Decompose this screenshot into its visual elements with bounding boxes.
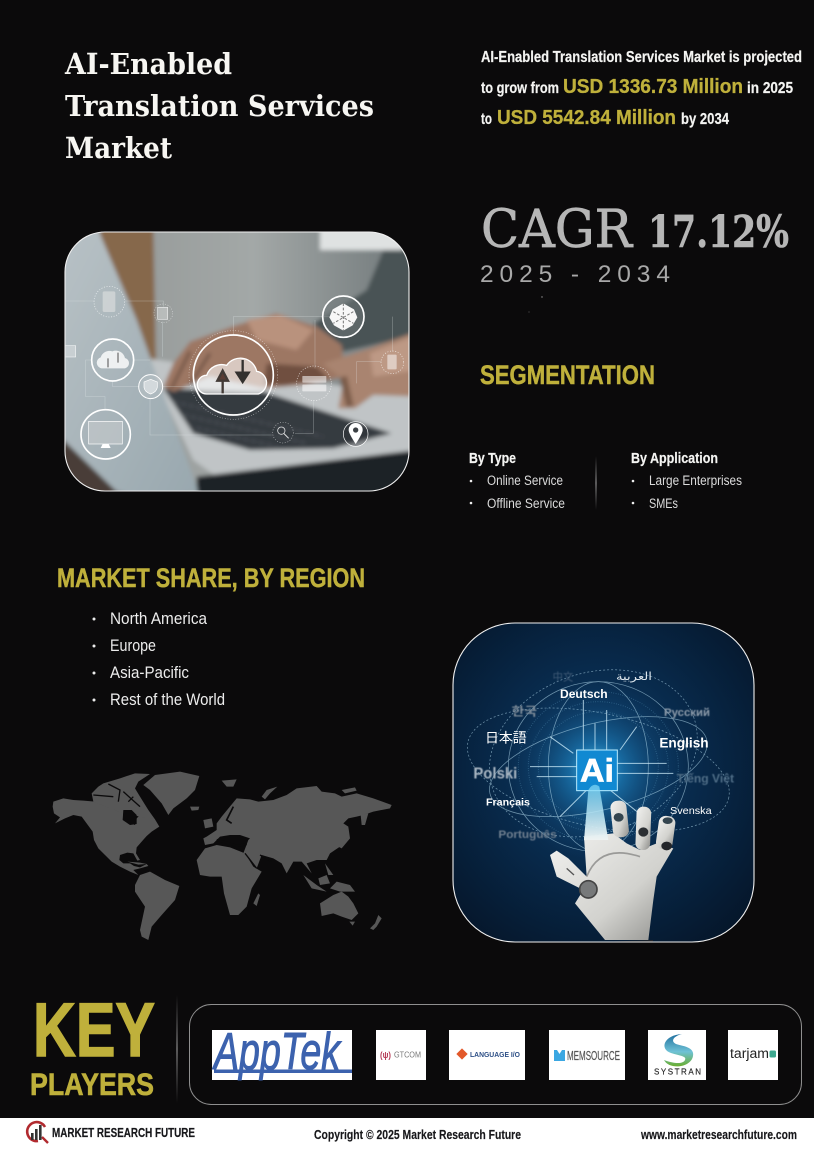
monitor icon [81, 410, 130, 459]
key players panel [190, 1004, 802, 1104]
heading: segmentation: SEGMENTATION [480, 360, 655, 390]
market projection text: to [481, 111, 492, 128]
logo: Language I/O [449, 1030, 525, 1080]
segment list: by type: Online Service [487, 473, 563, 488]
language labels: Français [486, 797, 530, 808]
segment list: by application: By Application [631, 450, 718, 467]
market projection text: by 2034 [681, 111, 729, 128]
CAGR: CAGR [481, 200, 634, 260]
language labels: 中文 [553, 671, 574, 684]
robot hand [550, 785, 676, 955]
logo: Systran [648, 1030, 706, 1080]
central cloud icon [189, 331, 278, 419]
segment list: by type [469, 450, 565, 511]
CAGR: 2025 - 2034 [480, 261, 670, 288]
key players heading [30, 988, 155, 1102]
language labels: العربية [616, 670, 652, 683]
title [64, 47, 374, 165]
language labels [473, 670, 734, 841]
logo: tarjama: tarjam [730, 1046, 769, 1061]
language labels: Polski [473, 765, 517, 782]
language labels: 日本語 [485, 731, 527, 746]
language labels: English [659, 734, 709, 750]
market projection text [481, 49, 802, 129]
logo: GTCOM [376, 1030, 426, 1080]
key players divider [176, 995, 178, 1103]
language labels: Tiếng Việt [677, 772, 734, 786]
phone icon [94, 286, 125, 317]
location pin icon [343, 422, 368, 446]
globe wireframe [467, 669, 730, 851]
segment list: by type: Offline Service [487, 496, 565, 511]
language labels: Svenska [670, 806, 712, 817]
market projection text: in 2025 [747, 80, 793, 97]
circuit lines [530, 700, 673, 817]
title: Market [65, 131, 173, 165]
segment list: by application [631, 450, 742, 511]
world map [53, 772, 392, 940]
market projection text: USD 5542.84 Million [497, 106, 676, 129]
language labels: Deutsch [560, 687, 608, 701]
globe mesh [518, 692, 678, 842]
CAGR [480, 200, 789, 312]
logo: GTCOM: GTCOM [394, 1050, 421, 1060]
photo background [66, 232, 408, 490]
footer brand name: MARKET RESEARCH FUTURE [52, 1126, 195, 1140]
server icon [297, 366, 331, 401]
small cloud icon [92, 339, 134, 381]
brain icon [323, 296, 364, 337]
language labels: Русский [664, 707, 710, 719]
heading: market share by region: MARKET SHARE, BY REGION [57, 563, 365, 593]
segment list: by application: SMEs [649, 496, 678, 511]
AI chip [577, 750, 617, 791]
shield icon [139, 375, 163, 399]
region list [92, 609, 225, 709]
image: robot hand touching AI globe with languages [452, 622, 755, 942]
AI chip: Ai [580, 753, 614, 789]
market projection text: to grow from [481, 80, 559, 97]
logo: tarjama [728, 1030, 778, 1080]
segment divider [596, 456, 597, 510]
database icon [381, 351, 404, 374]
magnifier icon [273, 422, 293, 443]
footer logo icon [27, 1122, 48, 1143]
navy backdrop [454, 624, 754, 942]
key players heading: KEY [33, 988, 155, 1073]
footer copyright: Copyright © 2025 Market Research Future [314, 1128, 521, 1142]
footer bar [0, 1118, 814, 1150]
logo: Systran: SYSTRAN [654, 1068, 701, 1076]
market projection text: USD 1336.73 Million [563, 75, 743, 98]
logo: AppTek: AppTek [212, 1023, 342, 1081]
segment list: by application: Large Enterprises [649, 473, 742, 488]
globe glow [526, 700, 667, 840]
image: hands typing on laptop with cloud icons [64, 232, 410, 492]
region list: Asia-Pacific [110, 663, 189, 682]
key players heading: PLAYERS [30, 1066, 154, 1102]
logo: Memsource [549, 1030, 625, 1080]
region list: Rest of the World [110, 690, 225, 709]
region list: North America [110, 609, 207, 628]
region list: Europe [110, 636, 156, 655]
language labels: Português [498, 829, 557, 841]
chart icon [154, 304, 173, 323]
title: Translation Services [65, 89, 374, 123]
language labels: 한국 [512, 703, 537, 718]
connector lines [65, 301, 392, 435]
logo: GTCOM: (ψ) [380, 1050, 391, 1060]
card icon [65, 346, 76, 357]
title: AI-Enabled [64, 47, 232, 81]
segment list: by type: By Type [469, 450, 516, 467]
logo: Memsource: MEMSOURCE [567, 1048, 620, 1063]
logo: Language I/O: LANGUAGE I/O [470, 1050, 520, 1059]
